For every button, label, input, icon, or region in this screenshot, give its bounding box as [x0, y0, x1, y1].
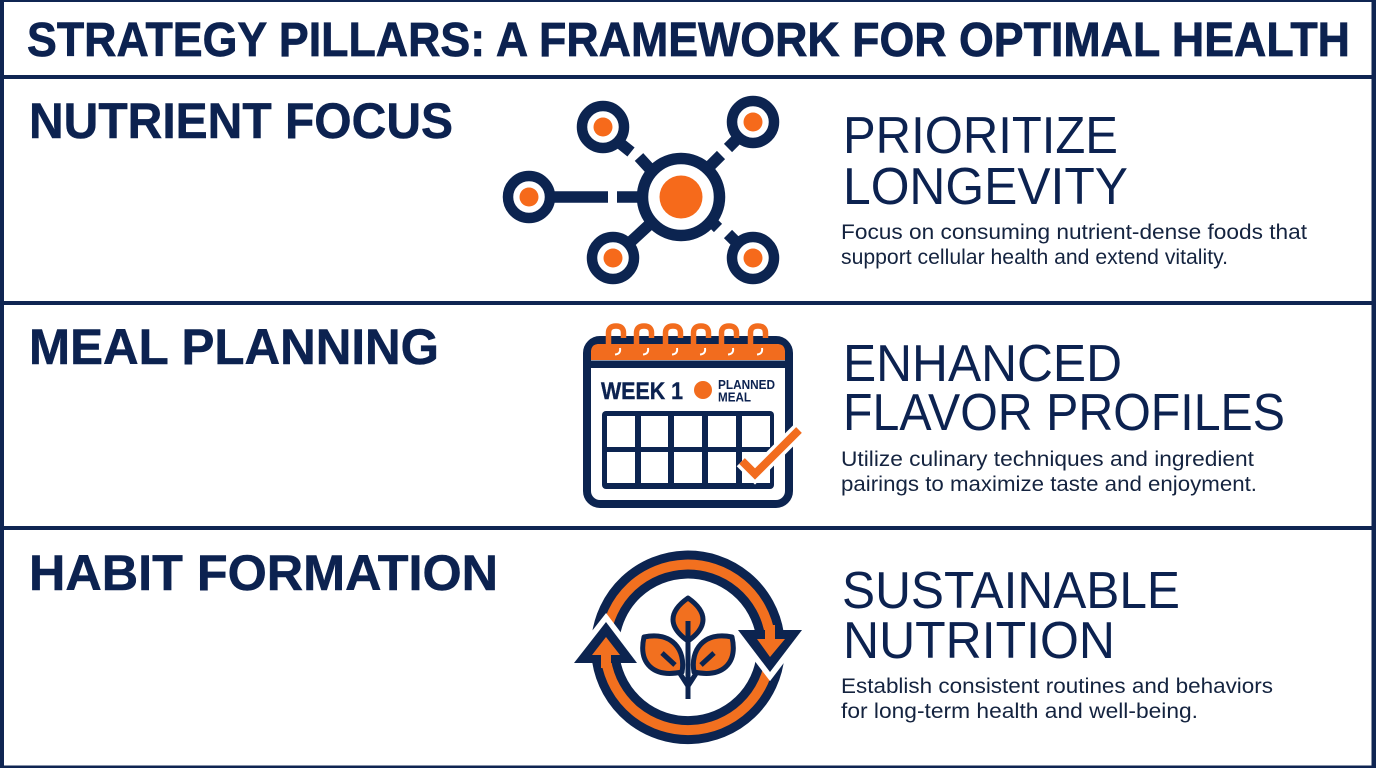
description: prioritize longevity: Focus on consuming nutrient-dense foods that — [841, 221, 1307, 244]
subheading: sustainable nutrition: SUSTAINABLE — [842, 562, 1180, 620]
icon: calendar — [587, 326, 799, 504]
description: sustainable nutrition: for long-term health and well-being. — [841, 700, 1198, 723]
description: enhanced flavor profiles: Utilize culinary techniques and ingredient — [841, 448, 1254, 471]
label: planned meal: PLANNED — [718, 378, 775, 392]
icon: nutrient network — [508, 101, 774, 279]
heading: meal planning: MEAL PLANNING — [29, 319, 439, 375]
panel: meal planning — [29, 319, 1285, 504]
label: week 1: WEEK 1 — [601, 378, 683, 405]
description: prioritize longevity: support cellular health and extend vitality. — [841, 246, 1228, 269]
calendar grid — [602, 411, 774, 489]
heading: nutrient focus: NUTRIENT FOCUS — [29, 93, 453, 149]
icon: plant — [643, 598, 733, 699]
subheading: prioritize longevity: LONGEVITY — [843, 158, 1128, 216]
label: planned meal: MEAL — [718, 390, 751, 404]
heading: habit formation: HABIT FORMATION — [29, 545, 498, 601]
panel: nutrient focus — [29, 93, 1307, 279]
panel: habit formation — [29, 545, 1273, 730]
icon: cycle arrows with plant — [574, 565, 802, 730]
description: sustainable nutrition: Establish consistent routines and behaviors — [841, 675, 1273, 698]
subheading: enhanced flavor profiles: FLAVOR PROFILES — [843, 384, 1285, 442]
description: enhanced flavor profiles: pairings to maximize taste and enjoyment. — [841, 473, 1257, 496]
icon: check mark — [742, 430, 799, 474]
icon: planned meal dot — [694, 381, 712, 399]
subheading: sustainable nutrition: NUTRITION — [843, 612, 1115, 670]
subheading: enhanced flavor profiles: ENHANCED — [843, 335, 1122, 393]
subheading: prioritize longevity: PRIORITIZE — [843, 107, 1118, 165]
